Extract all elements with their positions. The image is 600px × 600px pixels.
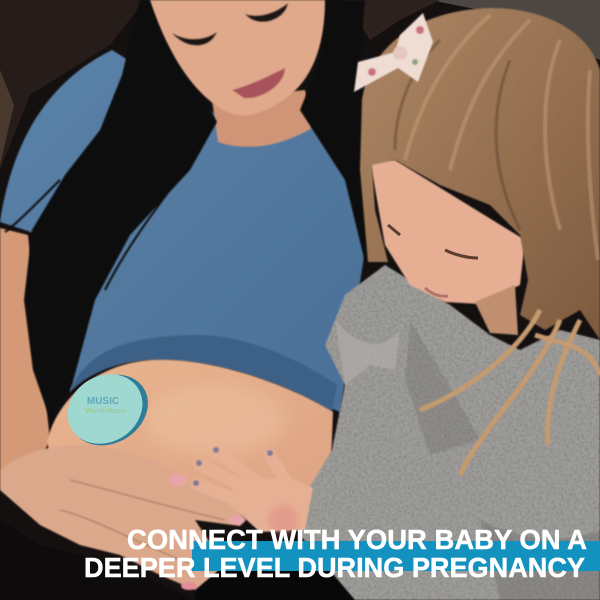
- belly: [47, 360, 333, 520]
- girl's lips: [425, 288, 448, 296]
- girl's eye: [445, 250, 478, 258]
- dark lower clothing: [0, 520, 195, 600]
- mother's face: [150, 0, 325, 115]
- music device on belly: [54, 360, 161, 460]
- girl's long strands: [420, 310, 600, 475]
- mother's left arm: [0, 228, 50, 480]
- mother's black hair: [5, 0, 378, 425]
- girl's fingernails: [196, 460, 202, 466]
- girl's face: [370, 160, 525, 304]
- girl's neck: [475, 285, 518, 335]
- mother's hand: [0, 445, 246, 590]
- mother's blue t-shirt: [0, 50, 365, 412]
- device edge: [57, 360, 161, 460]
- caption: [84, 524, 587, 583]
- fingernails: [169, 474, 187, 486]
- device logo: WombMusic: [85, 408, 127, 415]
- girl's hair: [360, 8, 600, 475]
- caption: CONNECT WITH YOUR BABY ON A: [127, 524, 587, 555]
- stray hair wisps: [5, 150, 200, 290]
- mother's neck: [212, 90, 312, 147]
- girl's hand on belly: [193, 447, 313, 535]
- device logo: [85, 396, 127, 415]
- girl's sweater: [300, 265, 600, 600]
- mother's eyes: [172, 32, 217, 46]
- device logo: MUSIC: [87, 396, 119, 407]
- device face: [54, 360, 156, 458]
- hair bow: [354, 13, 433, 92]
- blue caption band: [192, 541, 600, 571]
- caption: DEEPER LEVEL DURING PREGNANCY: [84, 552, 585, 583]
- mother's lips: [232, 68, 285, 98]
